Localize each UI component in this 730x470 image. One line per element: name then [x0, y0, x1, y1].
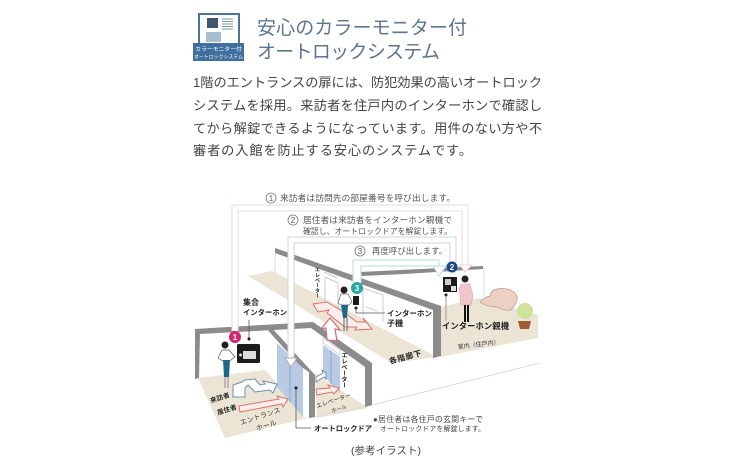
text block: description: 1階のエントランスの扉には、防犯効果の高いオートロック — [193, 74, 542, 90]
elevator: upper floor — [324, 272, 338, 312]
callout line 2: blue signal path — [285, 237, 456, 367]
label: door intercom: インターホン — [387, 308, 432, 318]
caption: (参考イラスト) — [351, 445, 421, 457]
marker 3: 3 — [355, 284, 360, 293]
icon: room monitor — [443, 277, 457, 321]
arrow: up from elevator — [321, 318, 340, 341]
step 2 label: 確認し、オートロックドアを解錠します。 — [303, 226, 452, 236]
step 3 label: 3 — [358, 247, 363, 256]
title: オートロックシステム — [257, 41, 440, 63]
label: door intercom: 子機 — [387, 318, 403, 328]
label: elevator hall — [315, 391, 352, 415]
label: collective intercom: 集合 — [243, 297, 259, 307]
step 2 label: 居住者は来訪者をインターホン親機で — [303, 214, 452, 225]
marker 1: 1 — [233, 333, 238, 342]
label: entrance hall: ホール — [255, 419, 278, 433]
arrow: elevator hall visitor — [316, 370, 326, 382]
callout line 1: pink signal path — [232, 205, 472, 331]
elevator: ground floor — [323, 338, 340, 393]
wall: upper corridor slab — [360, 266, 483, 276]
label: elevator lower: エレベーター — [340, 352, 347, 388]
label: collective intercom — [243, 297, 287, 317]
icon: entrance intercom panel — [237, 320, 260, 363]
label: visitor: 来訪者 — [209, 390, 231, 405]
text block: description: システムを採用。来訪者を住戸内のインターホンで確認し — [193, 98, 542, 113]
note: resident key — [373, 414, 485, 433]
icon: sofa — [480, 288, 517, 310]
floor: entrance hall — [198, 370, 308, 438]
step 2 label: 2 — [291, 216, 296, 225]
icon: color monitor auto-lock badge: オートロックシステム — [194, 54, 243, 60]
door: automatic lock — [277, 343, 309, 418]
floor: room — [440, 298, 538, 357]
marker 1 — [229, 331, 241, 343]
label: door intercom — [387, 308, 432, 328]
text block: description: 審者の入館を防止する安心のシステムです。 — [193, 143, 472, 158]
label: elevator upper: エレベーター — [314, 267, 320, 298]
icon: color monitor auto-lock badge: カラーモニター付 — [195, 45, 242, 53]
title: 安心のカラーモニター付 — [257, 17, 467, 39]
label: elevator hall: エレベーター — [315, 391, 352, 410]
label: auto-lock door with leader — [294, 386, 372, 433]
text block: description: てから解錠できるようになっています。用件のない方や不 — [193, 121, 542, 136]
arrow: resident route — [239, 396, 288, 412]
wall: entrance divider — [264, 326, 315, 418]
icon: door intercom unit — [353, 296, 385, 313]
label: each floor corridor: 各階廊下 — [388, 348, 423, 366]
unit door outline — [363, 288, 383, 322]
step 1 label: 来訪者は訪問先の部屋番号を呼び出します。 — [280, 192, 455, 203]
marker 2 — [446, 262, 458, 272]
wall: lower front slabs — [195, 322, 372, 407]
text block: description — [193, 74, 542, 158]
arrow: visitor route — [233, 379, 277, 397]
label: elevator hall: ホール — [330, 403, 348, 415]
illustration: building cutaway — [195, 248, 540, 438]
icon: resident corridor figure — [338, 286, 352, 331]
step 3 label: 再度呼び出します。 — [372, 246, 447, 256]
icon: potted plant — [517, 303, 533, 329]
arrows: corridor route — [313, 302, 372, 330]
floor: elevator hall — [315, 373, 368, 418]
label: master intercom: インターホン親機 — [442, 321, 510, 331]
label: collective intercom: インターホン — [243, 308, 287, 317]
back wall outlines — [275, 254, 540, 418]
icon: resident in room — [459, 276, 473, 322]
label: inside unit: 室内（住戸内） — [457, 338, 500, 351]
arrow: elevator hall resident — [316, 385, 339, 395]
note: resident key: ●居住者は各住戸の玄関キーで — [373, 414, 483, 424]
note: resident key: オートロックドアを解錠します。 — [380, 424, 485, 433]
step 1 label: 1 — [269, 194, 274, 203]
title — [257, 17, 467, 63]
marker 2: 2 — [450, 263, 455, 272]
label: resident: 居住者 — [216, 402, 238, 417]
icon: visitor figure — [218, 342, 235, 388]
icon: color monitor auto-lock badge — [193, 14, 244, 61]
label: entrance hall: エントランス — [239, 406, 282, 427]
step 2 label — [288, 214, 452, 236]
marker 3 — [351, 282, 363, 294]
label: auto-lock door with leader: オートロックドア — [314, 424, 372, 433]
wall: long diagonal — [275, 248, 441, 358]
callout line 3: teal signal path — [353, 260, 446, 283]
floor: corridor — [248, 271, 437, 363]
